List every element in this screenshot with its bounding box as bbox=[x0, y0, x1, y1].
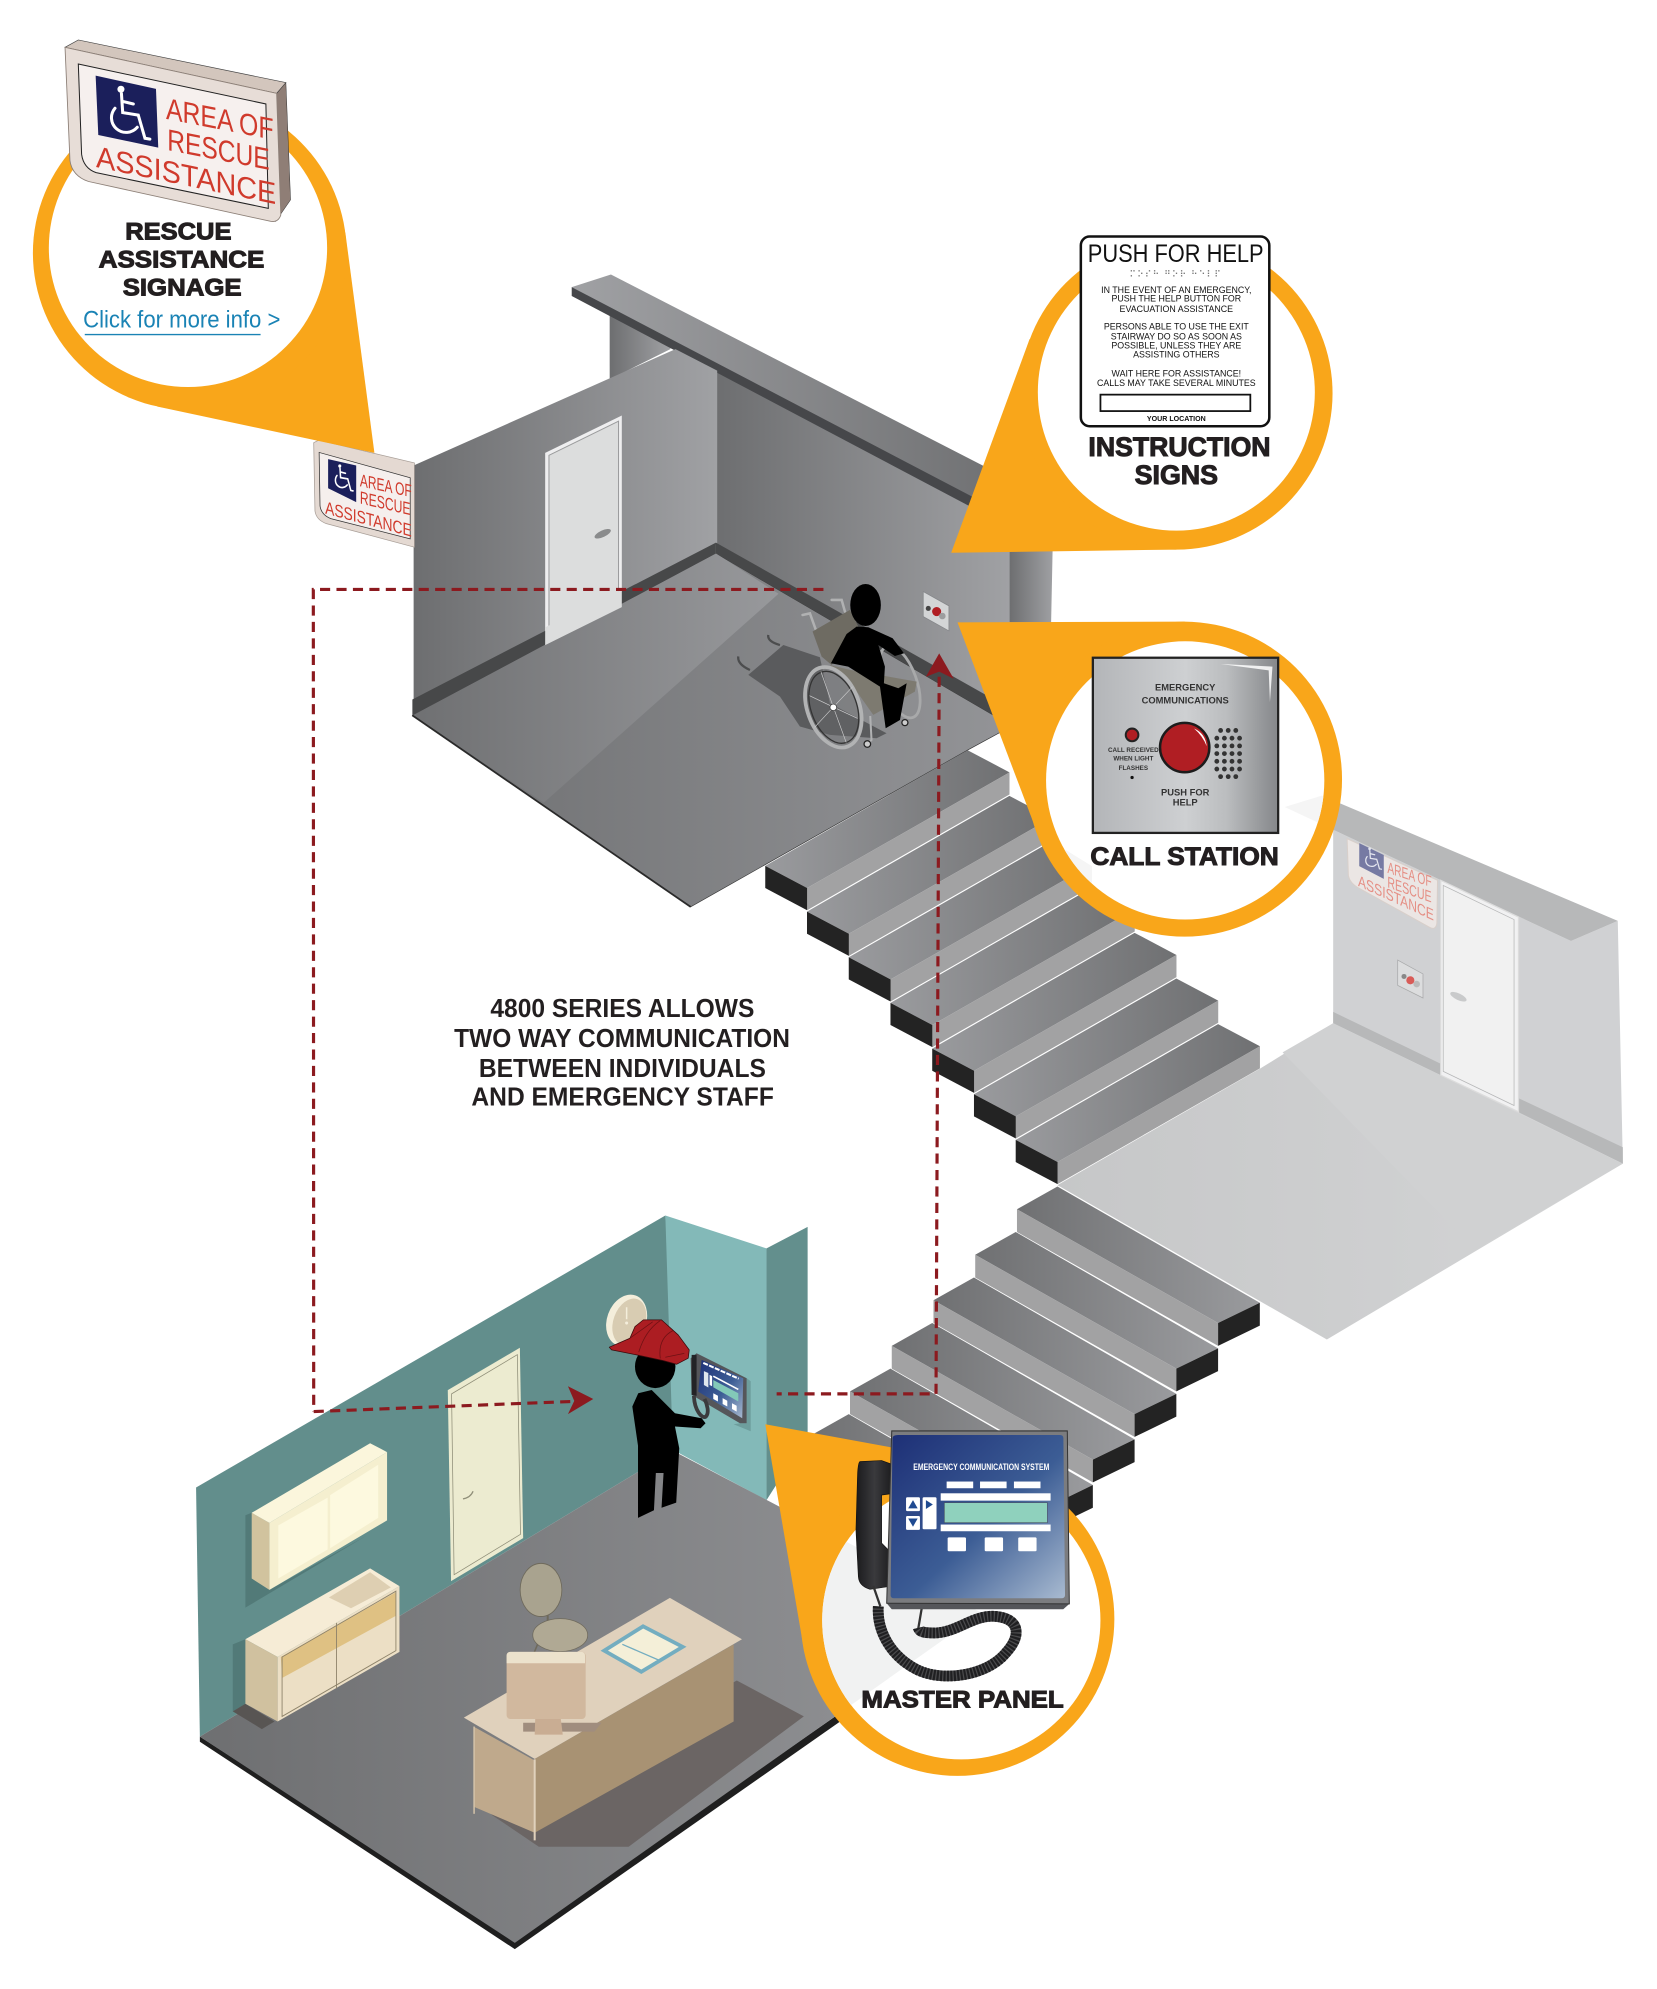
large sign: RESCUE bbox=[167, 123, 270, 177]
call station plate: PUSH FOR bbox=[1161, 788, 1210, 798]
faded floor bbox=[1057, 1023, 1623, 1339]
dark floor edge bbox=[200, 1711, 847, 1949]
callout: rescue assistance signage bbox=[33, 40, 374, 453]
push for help sign: ⠍⠕⠎⠓ ⠛⠕⠗ ⠓⠑⠇⠏ bbox=[1129, 269, 1222, 279]
call station plate: COMMUNICATIONS bbox=[1142, 695, 1229, 705]
door threshold redraw bbox=[545, 589, 622, 645]
master panel unit: EMERGENCY COMMUNICATION SYSTEM bbox=[913, 1462, 1049, 1472]
clock bbox=[599, 1289, 654, 1352]
callout: instruction signs bbox=[951, 237, 1333, 553]
baseboards bbox=[412, 543, 1012, 726]
monitor bbox=[507, 1652, 602, 1735]
faint background through callout bbox=[1064, 796, 1324, 882]
push for help sign: PUSH FOR HELP bbox=[1088, 240, 1264, 268]
call station on wall bbox=[923, 592, 949, 631]
callout: master panel: MASTER PANEL bbox=[861, 1687, 1064, 1714]
upper cabinet bbox=[245, 1443, 387, 1608]
small wall sign bbox=[314, 440, 414, 547]
push for help sign: PERSONS ABLE TO USE THE EXIT bbox=[1104, 321, 1249, 331]
faded sign: AREA OF bbox=[1387, 859, 1432, 891]
wall master panel bbox=[691, 1353, 751, 1431]
lower stair flight bbox=[808, 1186, 1260, 1573]
chair bbox=[520, 1563, 588, 1660]
wheelchair user bbox=[738, 584, 928, 755]
left wall bbox=[414, 349, 717, 703]
call station plate: HELP bbox=[1173, 798, 1198, 808]
faded door bbox=[1441, 880, 1518, 1112]
large sign: AREA OF bbox=[166, 92, 273, 147]
back wall bbox=[716, 369, 1009, 734]
door bbox=[448, 1348, 523, 1581]
faded sign bbox=[1347, 839, 1438, 928]
call station plate: EMERGENCY bbox=[1155, 683, 1216, 693]
callout: rescue assistance signage: RESCUE bbox=[125, 219, 231, 246]
floor bbox=[200, 1451, 982, 1943]
wheelchair shadow bbox=[748, 645, 887, 738]
arrowhead to call station bbox=[926, 653, 954, 679]
desk bbox=[464, 1598, 742, 1840]
call station plate: WHEN LIGHT bbox=[1113, 756, 1153, 763]
ceiling beam bbox=[572, 274, 1025, 508]
push for help sign: PUSH THE HELP BUTTON FOR bbox=[1111, 294, 1241, 304]
faded call station bbox=[1398, 960, 1423, 998]
callout: instruction signs: SIGNS bbox=[1135, 460, 1218, 490]
faded beam bbox=[1285, 796, 1618, 941]
text: system description bbox=[454, 995, 790, 1112]
small wall sign: RESCUE bbox=[360, 488, 410, 519]
lower cabinet bbox=[233, 1568, 399, 1729]
document on desk bbox=[604, 1626, 683, 1672]
upper stair flight bbox=[765, 750, 1260, 1184]
big wheel bbox=[795, 659, 872, 755]
text: system description: BETWEEN INDIVIDUALS bbox=[479, 1055, 766, 1083]
callout: master panel bbox=[765, 1424, 1114, 1776]
faded wall bbox=[1333, 830, 1623, 1164]
text: system description: TWO WAY COMMUNICATION bbox=[454, 1025, 790, 1053]
push for help sign: CALLS MAY TAKE SEVERAL MINUTES bbox=[1097, 378, 1256, 388]
callout: rescue assistance signage: SIGNAGE bbox=[123, 274, 242, 301]
push for help sign: ASSISTING OTHERS bbox=[1133, 349, 1220, 359]
callout: call station: CALL STATION bbox=[1090, 843, 1279, 871]
master panel unit bbox=[887, 1431, 1069, 1609]
right pillar bbox=[1009, 500, 1054, 622]
push for help sign: YOUR LOCATION bbox=[1147, 415, 1206, 423]
coiled cord bbox=[873, 1586, 1016, 1676]
call station plate: CALL RECEIVED bbox=[1108, 747, 1159, 754]
desk shadow bbox=[491, 1680, 804, 1847]
text: system description: 4800 SERIES ALLOWS bbox=[490, 995, 754, 1023]
push for help sign: EVACUATION ASSISTANCE bbox=[1120, 304, 1233, 314]
faded sign: RESCUE bbox=[1387, 874, 1432, 906]
arrowhead to operator bbox=[568, 1386, 593, 1414]
lower control room bbox=[196, 1216, 982, 1949]
speaker grille bbox=[1214, 728, 1242, 779]
floor bbox=[412, 553, 1012, 907]
upper room bbox=[412, 274, 1054, 907]
faded baseboards bbox=[1333, 1012, 1623, 1164]
red helmet bbox=[609, 1320, 689, 1364]
large sign: ASSISTANCE bbox=[96, 139, 276, 211]
wheelchair symbol bbox=[111, 86, 150, 139]
worker figure bbox=[609, 1320, 706, 1518]
push for help sign: STAIRWAY DO SO AS SOON AS bbox=[1111, 332, 1242, 342]
call station plate bbox=[1093, 658, 1278, 833]
push for help sign: IN THE EVENT OF AN EMERGENCY, bbox=[1101, 285, 1252, 295]
text: system description: AND EMERGENCY STAFF bbox=[471, 1084, 774, 1112]
side wall bbox=[767, 1227, 808, 1500]
dashed communication lines bbox=[313, 589, 939, 1412]
large sign bbox=[65, 40, 291, 222]
callout: rescue assistance signage: ASSISTANCE bbox=[99, 247, 264, 274]
callout: rescue assistance signage: Click for more info > bbox=[83, 307, 280, 334]
faded landing room bbox=[1057, 796, 1623, 1339]
faded sign: ASSISTANCE bbox=[1358, 872, 1434, 924]
push for help sign bbox=[1081, 237, 1269, 426]
person silhouette bbox=[831, 584, 907, 728]
left wall bbox=[196, 1216, 673, 1737]
door bbox=[545, 416, 622, 645]
pillar behind left wall bbox=[610, 314, 670, 379]
push for help sign: WAIT HERE FOR ASSISTANCE! bbox=[1112, 368, 1241, 378]
callout: call station bbox=[958, 622, 1342, 937]
small wall sign: AREA OF bbox=[360, 470, 412, 501]
callout: instruction signs: INSTRUCTION bbox=[1088, 432, 1271, 462]
telephone handset bbox=[856, 1461, 893, 1589]
push for help sign: POSSIBLE, UNLESS THEY ARE bbox=[1111, 340, 1241, 350]
call station plate: FLASHES bbox=[1119, 765, 1148, 772]
back wall bbox=[665, 1216, 767, 1500]
small wall sign: ASSISTANCE bbox=[325, 498, 412, 541]
